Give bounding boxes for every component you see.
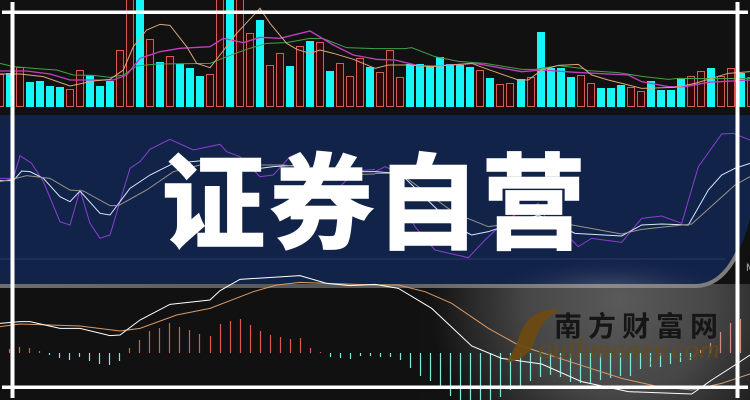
MACD red sticks	[10, 319, 320, 353]
watermark chinese name: 南方财富网	[554, 310, 724, 342]
moving averages left half	[0, 8, 375, 86]
MACD left lines	[0, 276, 375, 336]
chart: MACD	[0, 276, 750, 400]
watermark	[506, 310, 724, 364]
panel: navy title band	[0, 115, 750, 286]
title: 券	[270, 147, 373, 262]
MACD cyan sticks	[50, 353, 690, 400]
title: 自	[376, 147, 479, 262]
panel fill	[0, 115, 750, 284]
chart: volume bars and moving averages	[0, 0, 750, 107]
cyan volume bars	[6, 0, 745, 107]
lower right glow	[420, 284, 750, 400]
chart: KDJ lines	[0, 133, 750, 259]
icon: logo swoosh	[506, 310, 560, 362]
MACD pink sticks in watermark	[700, 319, 740, 353]
MACD right lines	[375, 284, 750, 394]
title	[162, 147, 585, 262]
title: 证	[162, 147, 265, 262]
red volume bars	[0, 0, 750, 106]
panel edge	[0, 252, 736, 288]
title: 营	[482, 147, 585, 262]
KDJ left half	[0, 139, 375, 238]
KDJ right half	[375, 133, 750, 258]
panel bottom glow	[300, 200, 750, 284]
moving averages right half	[375, 48, 750, 88]
KDJ baseline	[0, 258, 725, 260]
watermark domain: outhmoney.com	[538, 334, 720, 364]
